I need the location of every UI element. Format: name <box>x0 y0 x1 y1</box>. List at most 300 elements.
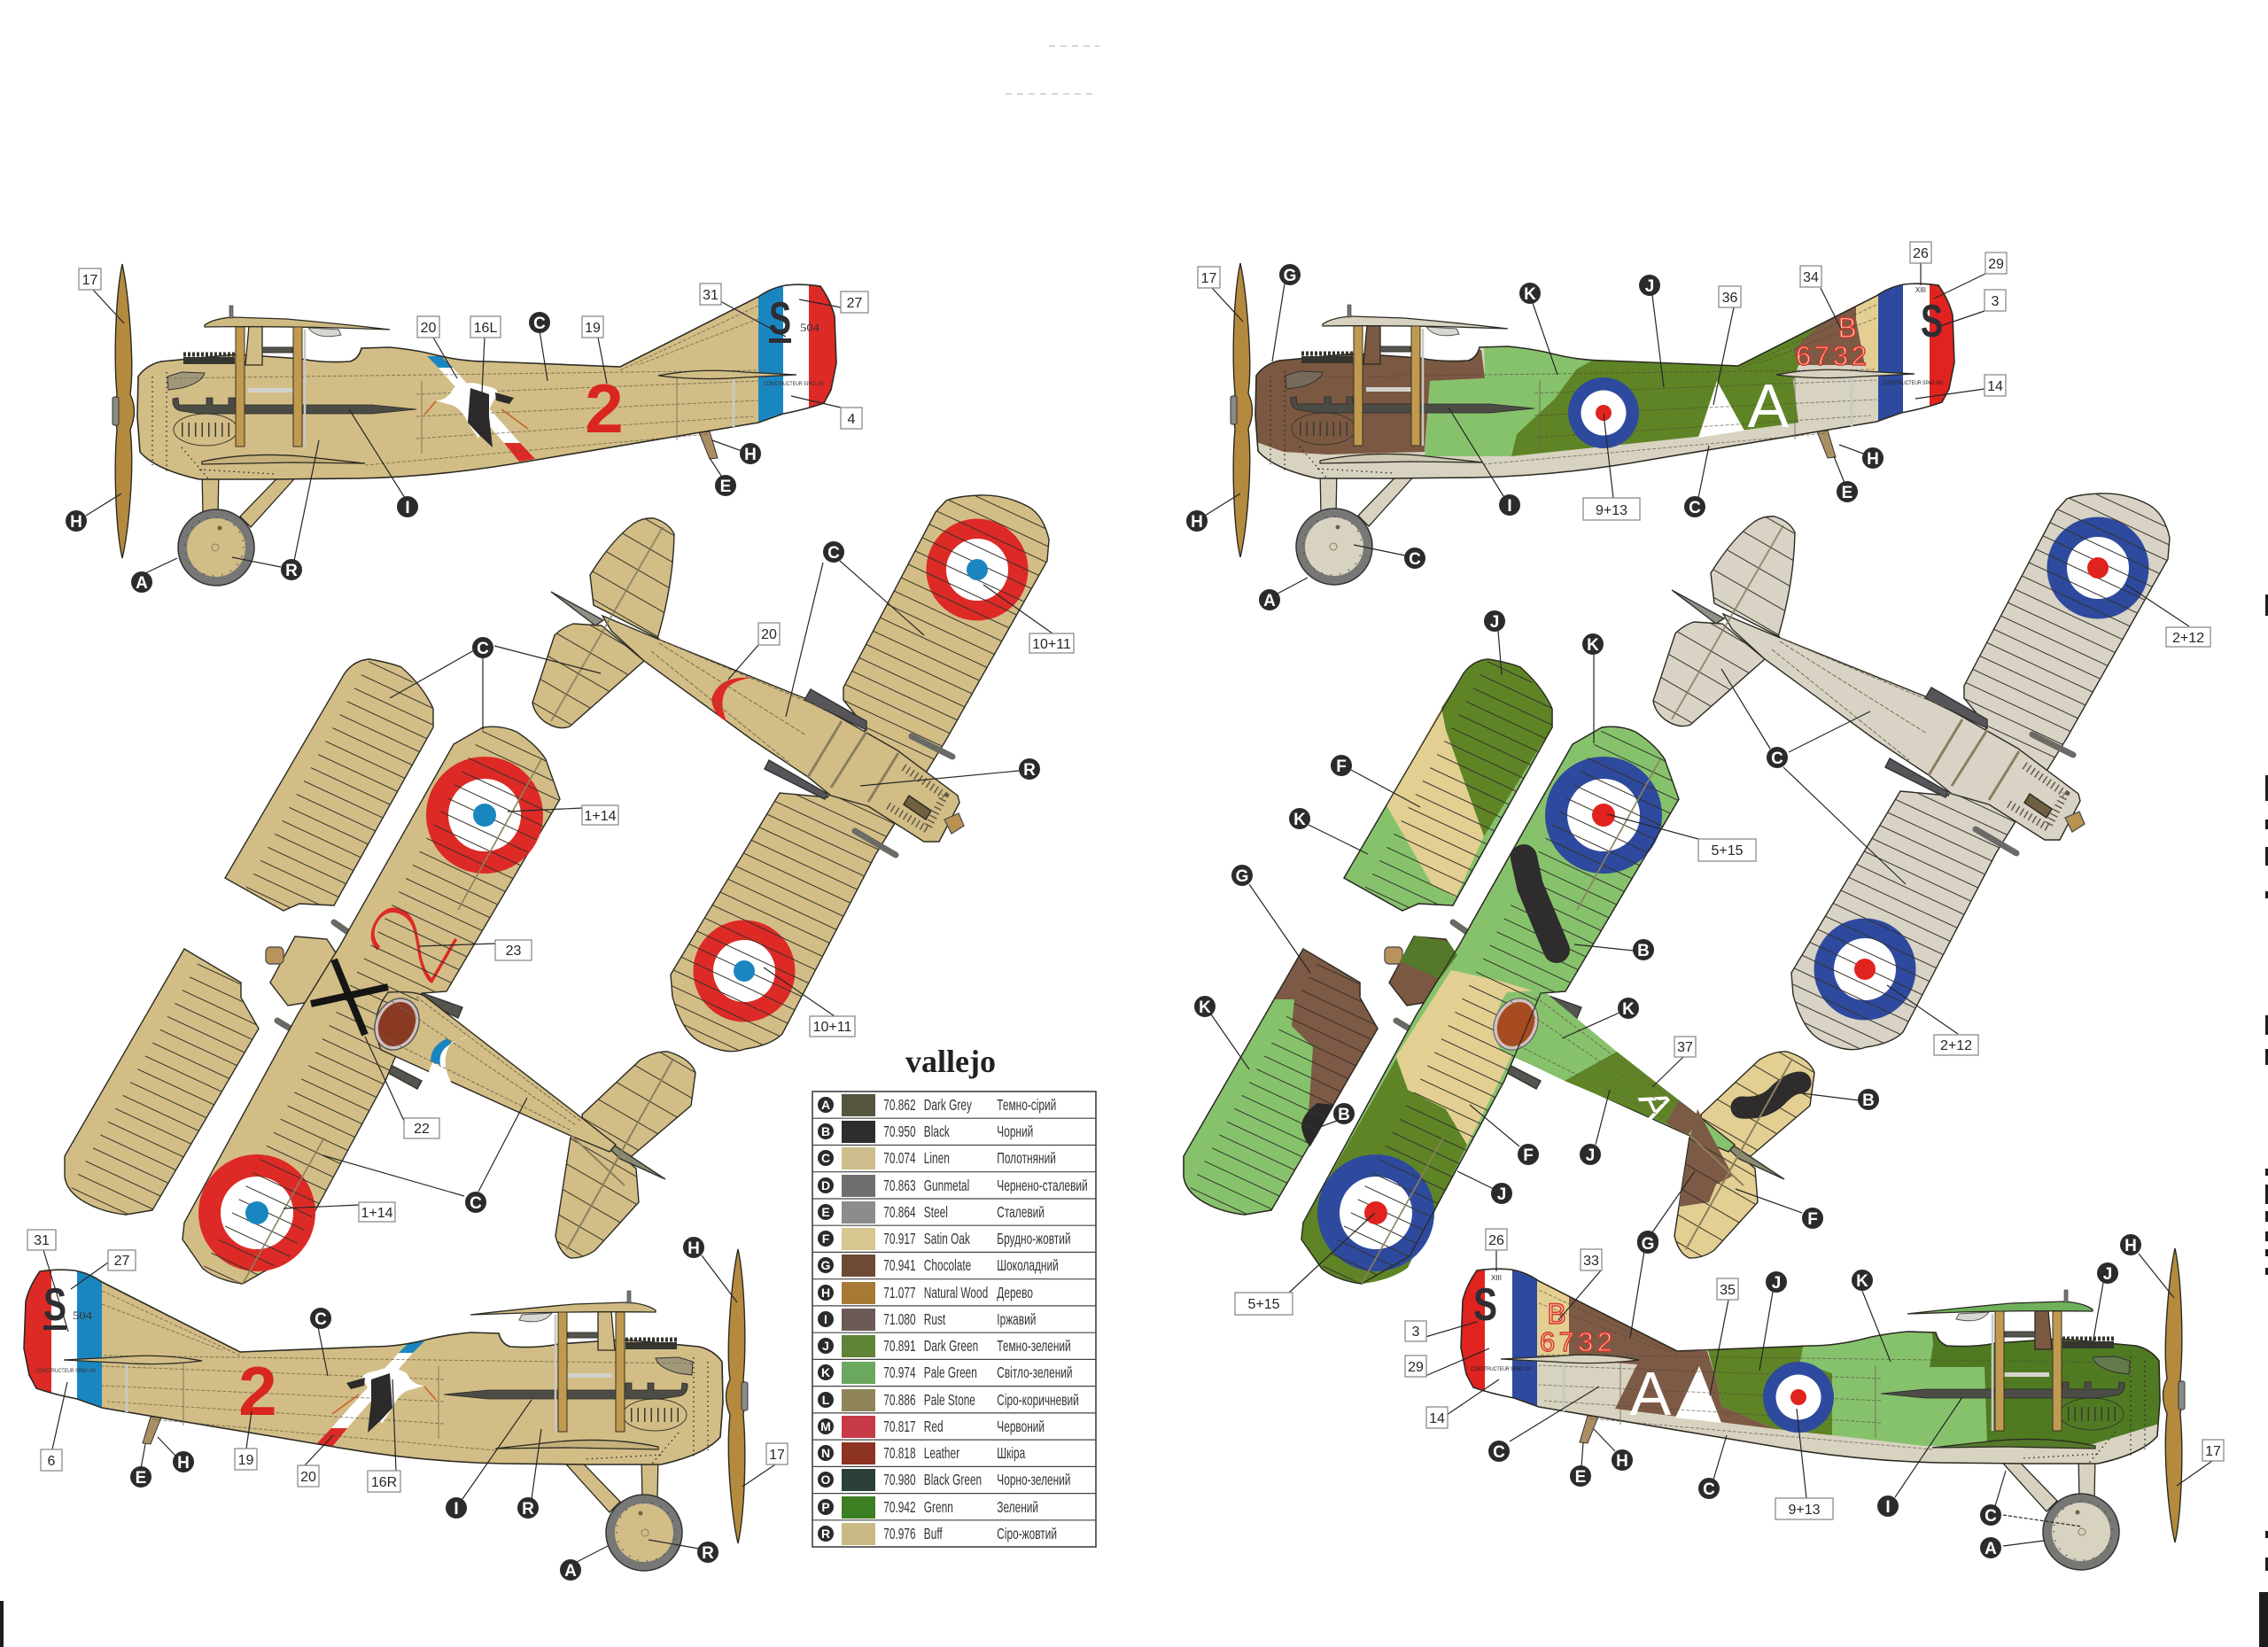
aircraft: British SPAD right side view: B <box>1547 1298 1566 1330</box>
callout 4: 4 <box>848 412 856 427</box>
callout H propeller: H <box>1191 513 1203 532</box>
callout 16R: 16R <box>371 1475 397 1490</box>
callout 14 <box>1915 375 2006 399</box>
callout E <box>130 1444 151 1488</box>
callouts: British right side view <box>1405 1229 2224 1558</box>
legend row J <box>818 1335 1071 1357</box>
callouts: French upper surfaces <box>284 637 618 1222</box>
legend row H: Дерево <box>997 1285 1033 1302</box>
callout 27 <box>71 1250 136 1289</box>
legend row I <box>818 1309 1036 1331</box>
aircraft: British SPAD top view <box>1653 493 2170 1050</box>
callout K lower: K <box>1199 998 1211 1017</box>
legend row L: Pale Stone <box>924 1392 975 1410</box>
callout C bottom: C <box>470 1194 482 1213</box>
camouflage: fuselage: A <box>1629 1082 1683 1126</box>
callout 17 <box>79 268 124 323</box>
legend row L: L <box>822 1393 830 1407</box>
callout 3: 3 <box>1992 294 2000 309</box>
legend row K: 70.974 <box>883 1364 916 1382</box>
legend row L: Сіро-коричневий <box>997 1392 1079 1410</box>
legend row A: Темно-сірий <box>997 1097 1056 1115</box>
legend row R: Сіро-жовтий <box>997 1526 1057 1543</box>
callout 19: 19 <box>585 321 601 336</box>
callout C gear <box>1980 1471 2082 1527</box>
legend row A: A <box>821 1098 830 1112</box>
legend row R: 70.976 <box>883 1526 916 1543</box>
callout J: J <box>1772 1274 1781 1293</box>
callout J top: J <box>1490 613 1499 632</box>
legend row H: H <box>821 1286 830 1300</box>
callout K lower <box>1194 996 1249 1069</box>
callout 20: 20 <box>761 627 777 642</box>
callout J fuselage: J <box>1586 1146 1595 1165</box>
callout C: C <box>1771 750 1783 768</box>
callout E <box>1834 456 1858 502</box>
aircraft: British SPAD right side view <box>1453 1248 2185 1570</box>
legend row F <box>818 1228 1070 1250</box>
callout R: R <box>1023 761 1036 780</box>
legend row E: E <box>821 1205 830 1219</box>
legend row E: Steel <box>924 1204 948 1222</box>
legend row A: 70.862 <box>883 1097 916 1115</box>
callout 27: 27 <box>847 296 863 311</box>
legend row E: 70.864 <box>883 1204 916 1222</box>
callout 27: 27 <box>114 1254 129 1269</box>
callout K wing <box>1582 633 1604 743</box>
callout H propeller <box>2120 1234 2174 1298</box>
legend row N <box>818 1442 1026 1464</box>
markings: French right side view: S <box>43 1279 66 1331</box>
callout F tail <box>1736 1189 1823 1229</box>
callout 31 <box>27 1230 68 1332</box>
callout 5+15 upper <box>1607 814 1756 861</box>
aircraft: British SPAD right side view: XIII <box>1491 1274 1502 1282</box>
callout 23 <box>419 940 532 960</box>
callout 10+11 upper: 10+11 <box>1032 637 1071 652</box>
legend row F: Satin Oak <box>924 1231 970 1248</box>
callout C belly: C <box>1689 499 1701 517</box>
markings: French right side view: CONSTRUCTEUR SPAD XIII <box>35 1369 96 1374</box>
aircraft: French SPAD left side view: CONSTRUCTEUR SPAD XIII <box>764 382 824 387</box>
callout J <box>1639 275 1664 387</box>
callout C wheel <box>1354 545 1425 569</box>
callout H propeller: H <box>70 513 82 532</box>
callout J <box>1759 1271 1787 1371</box>
callout H propeller <box>66 493 121 532</box>
aircraft: British SPAD right side view: CONSTRUCTEUR SPAD XIII <box>1471 1367 1531 1372</box>
aircraft: British SPAD right side view: S <box>1473 1279 1497 1331</box>
legend row A <box>818 1094 1056 1116</box>
callout 19: 19 <box>238 1453 253 1468</box>
callout G <box>1231 865 1310 973</box>
callout C: C <box>827 544 840 563</box>
legend row D: Gunmetal <box>924 1177 969 1195</box>
aircraft: British SPAD right side view: 6732 <box>1540 1326 1612 1357</box>
legend row M: 70.817 <box>883 1418 916 1436</box>
camouflage: upper wing <box>1301 858 1557 1284</box>
callout H skid <box>1839 445 1884 469</box>
callout 26: 26 <box>1488 1233 1504 1248</box>
legend row P: 70.942 <box>883 1499 916 1517</box>
callout 17: 17 <box>2205 1444 2221 1459</box>
callout 14 <box>1426 1379 1499 1428</box>
callout G: G <box>1284 267 1296 285</box>
callout 4 <box>791 396 862 429</box>
callout C belly: C <box>1703 1480 1715 1499</box>
callout C <box>1721 669 1906 884</box>
callout H skid: H <box>177 1454 190 1472</box>
callout B tail: B <box>1862 1092 1875 1110</box>
legend row I: Іржавий <box>997 1311 1036 1329</box>
callout F wing <box>1470 1105 1539 1165</box>
callout A: A <box>1263 592 1276 610</box>
callout 3 <box>1405 1321 1477 1341</box>
legend row B: 70.950 <box>883 1123 916 1141</box>
callout 27 <box>799 291 868 313</box>
callout R wheel <box>232 557 281 567</box>
legend row B <box>818 1121 1033 1143</box>
callout J top <box>1484 610 1505 675</box>
callout H skid: H <box>1616 1452 1628 1471</box>
callout 31: 31 <box>703 288 718 303</box>
callout B wing: B <box>1637 942 1650 960</box>
callout K wing: K <box>1587 636 1599 655</box>
aircraft: British SPAD right side view: A <box>1630 1359 1672 1428</box>
callout 16R <box>368 1379 400 1492</box>
aircraft: British SPAD upper surfaces <box>1184 659 1814 1284</box>
heading: vallejo: vallejo <box>905 1044 996 1079</box>
aircraft: British SPAD left side view <box>1231 263 1960 585</box>
callout K fuselage <box>1562 998 1639 1038</box>
callouts: British upper surfaces <box>1194 610 1879 1315</box>
callout 17 <box>2177 1440 2224 1486</box>
legend row N: Шкіра <box>997 1445 1026 1463</box>
callout I <box>446 1400 532 1519</box>
callout E: E <box>136 1469 146 1488</box>
aircraft: French SPAD top view <box>532 495 1049 1052</box>
callout G tail: G <box>1642 1233 1654 1252</box>
callout 10+11 upper <box>983 585 1074 653</box>
legend row P: P <box>821 1500 830 1514</box>
callout 10+11 lower <box>764 967 855 1037</box>
callout C <box>529 312 550 381</box>
legend row O: 70.980 <box>883 1472 916 1489</box>
callout K fuselage: K <box>1622 1000 1635 1019</box>
callout R wheel <box>649 1540 718 1563</box>
legend row C: 70.074 <box>883 1150 916 1168</box>
legend row N: Leather <box>924 1445 959 1463</box>
legend row B: Чорний <box>997 1123 1033 1141</box>
callout H skid <box>1594 1429 1633 1471</box>
camouflage: fuselage <box>1495 991 1800 1207</box>
legend row R <box>818 1523 1057 1545</box>
legend row O: Black Green <box>924 1472 982 1489</box>
callout H skid <box>712 440 761 464</box>
legend row J: Темно-зелений <box>997 1338 1071 1356</box>
legend row I: I <box>824 1312 827 1326</box>
callout E: E <box>1842 484 1852 502</box>
callout F <box>1331 755 1420 807</box>
callout A: A <box>136 574 148 593</box>
callout 1+14 upper: 1+14 <box>584 809 617 824</box>
callout K <box>1852 1270 1891 1362</box>
callout 29 <box>1405 1348 1489 1377</box>
aircraft: French SPAD upper surfaces <box>65 659 695 1284</box>
aircraft: British SPAD left side view: XIII <box>1915 286 1926 294</box>
callout 29 <box>1934 252 2007 299</box>
legend row J: Dark Green <box>924 1338 978 1356</box>
legend row O: Чорно-зелений <box>997 1472 1070 1489</box>
legend row J: J <box>822 1339 829 1353</box>
legend row N: 70.818 <box>883 1445 916 1463</box>
callout 16L: 16L <box>474 321 497 336</box>
callout R wing <box>517 1429 541 1519</box>
legend row K: Pale Green <box>924 1364 977 1382</box>
callout H skid: H <box>1867 450 1879 469</box>
legend row H <box>818 1282 1033 1304</box>
legend row D <box>818 1175 1088 1197</box>
callout 35: 35 <box>1720 1283 1736 1298</box>
aircraft: French SPAD right side view <box>21 1249 748 1571</box>
callout H propeller: H <box>2124 1237 2137 1255</box>
legend row C: C <box>821 1151 830 1165</box>
legend row G: 70.941 <box>883 1257 916 1275</box>
aircraft: British SPAD left side view: 6732 <box>1796 340 1867 371</box>
legend row E <box>818 1201 1045 1224</box>
legend row D: Чернено-сталевий <box>997 1177 1088 1195</box>
callout 3: 3 <box>1412 1325 1420 1340</box>
legend row N: N <box>821 1446 830 1460</box>
legend row M: Червоний <box>997 1418 1045 1436</box>
aircraft: British SPAD left side view: S <box>1921 296 1943 347</box>
callout C: C <box>533 315 546 333</box>
callout C bottom <box>322 1098 527 1213</box>
callout A <box>1259 578 1308 610</box>
callout J wing <box>1457 1171 1512 1204</box>
callout R wing: R <box>285 562 298 580</box>
legend row L: 70.886 <box>883 1392 916 1410</box>
legend row H: Natural Wood <box>924 1285 988 1302</box>
callout H propeller <box>1186 493 1240 532</box>
callout 19 <box>582 316 607 384</box>
legend row M: Red <box>924 1418 944 1436</box>
camouflage: detached wing upper <box>1386 659 1552 897</box>
legend row K: Світло-зелений <box>997 1364 1073 1382</box>
callout C: C <box>315 1310 327 1329</box>
callout G <box>1630 1232 1658 1338</box>
callout F tail: F <box>1807 1210 1818 1229</box>
callout C <box>310 1308 331 1376</box>
callout 2+12 upper <box>2126 585 2210 647</box>
callout G tail <box>1637 1171 1695 1252</box>
callout 20 <box>298 1435 333 1487</box>
callout J fuselage <box>1580 1090 1610 1165</box>
callout I: I <box>1507 497 1512 516</box>
callout A <box>131 558 177 593</box>
legend row G: G <box>821 1258 831 1272</box>
callout C tail: C <box>1493 1443 1505 1462</box>
callout B tail <box>1788 1089 1879 1110</box>
callout 37: 37 <box>1677 1040 1693 1055</box>
callout C <box>786 541 924 717</box>
callout 22: 22 <box>414 1122 430 1137</box>
callout 10+11 lower: 10+11 <box>813 1020 851 1035</box>
callout 16L <box>470 316 501 392</box>
markings: French right side view <box>35 1279 277 1430</box>
callouts: British top view <box>1721 585 2210 1055</box>
aircraft: British SPAD left side view: A <box>1748 371 1790 440</box>
callout J wing: J <box>1497 1185 1506 1204</box>
callout 36: 36 <box>1722 291 1738 306</box>
callout 6: 6 <box>48 1454 56 1469</box>
aircraft: British SPAD left side view: B <box>1837 312 1857 344</box>
callout I: I <box>405 499 410 517</box>
legend row C <box>818 1147 1056 1169</box>
callout 23: 23 <box>506 944 521 959</box>
callout G: G <box>1642 1235 1654 1254</box>
callout H propeller: H <box>687 1239 700 1258</box>
legend row F: 70.917 <box>883 1231 916 1248</box>
callout 19 <box>235 1411 257 1470</box>
callout 17 <box>742 1443 788 1487</box>
callout I: I <box>454 1500 459 1519</box>
callouts: French top view <box>728 541 1074 1037</box>
legend row R: Buff <box>924 1526 943 1543</box>
legend row O <box>818 1469 1070 1491</box>
callout 9+13: 9+13 <box>1596 503 1627 518</box>
callout 26 <box>1486 1229 1507 1271</box>
callout 31 <box>700 284 786 337</box>
legend row R: R <box>821 1527 830 1541</box>
legend row F: Брудно-жовтий <box>997 1231 1070 1248</box>
legend row D: D <box>821 1178 830 1193</box>
aircraft: French SPAD left side view: S <box>769 293 791 345</box>
callout G: G <box>1236 867 1248 886</box>
callout C top <box>390 637 601 730</box>
aircraft: French SPAD upper surfaces: 2 <box>333 877 487 1006</box>
callout K: K <box>1524 285 1536 304</box>
callout B lower: B <box>1338 1106 1350 1124</box>
callout E <box>1570 1442 1591 1487</box>
callout A: A <box>1984 1540 1997 1558</box>
legend row D: 70.863 <box>883 1177 916 1195</box>
callout R wing <box>281 440 319 580</box>
legend row J: 70.891 <box>883 1338 916 1356</box>
legend row P: Grenn <box>924 1499 953 1517</box>
callout A: A <box>564 1562 577 1581</box>
legend row I: Rust <box>924 1311 946 1329</box>
callout 26 <box>1910 242 1931 285</box>
callout I <box>349 409 418 517</box>
callouts: British left side view <box>1186 242 2007 610</box>
callout 22 <box>365 1037 439 1138</box>
callout 20 <box>417 316 457 378</box>
legend row K: K <box>821 1365 830 1379</box>
callout J nose: J <box>2103 1265 2112 1284</box>
callout 34: 34 <box>1803 270 1819 285</box>
edge registration marks <box>0 594 2268 1647</box>
callout B wing <box>1574 939 1654 960</box>
callout 17: 17 <box>769 1448 785 1463</box>
callout 20 <box>728 623 780 680</box>
legend row C: Linen <box>924 1150 950 1168</box>
callout 2+12 upper: 2+12 <box>2172 631 2204 646</box>
callout 2+12 lower <box>1887 985 1978 1055</box>
callout K detached: K <box>1293 811 1306 829</box>
callout C gear: C <box>1984 1507 1997 1526</box>
callout 35 <box>1710 1278 1738 1395</box>
callout C belly <box>1698 1435 1727 1499</box>
callout 9+13 <box>1775 1409 1833 1519</box>
callout 2+12 lower: 2+12 <box>1940 1038 1972 1053</box>
callout 17 <box>1198 267 1243 322</box>
callout A <box>560 1546 608 1581</box>
callout 37 <box>1652 1037 1696 1087</box>
callout 33 <box>1558 1249 1602 1320</box>
callout J: J <box>1645 277 1654 296</box>
callout 14: 14 <box>1429 1411 1445 1426</box>
legend row O: O <box>821 1472 831 1487</box>
callout 34 <box>1800 266 1842 330</box>
camouflage: detached wing lower <box>1273 949 1378 1146</box>
callout H skid <box>158 1437 194 1472</box>
legend row G: Chocolate <box>924 1257 971 1275</box>
legend row M <box>818 1416 1045 1438</box>
callout R wheel: R <box>702 1544 714 1563</box>
callout 5+15 lower <box>1235 1213 1375 1315</box>
callout 9+13 <box>1583 414 1640 520</box>
callouts: French right side view <box>27 1230 788 1581</box>
callout 29: 29 <box>1988 257 2004 272</box>
legend row P: Зелений <box>997 1499 1038 1517</box>
callout 17: 17 <box>82 273 97 288</box>
callout 36 <box>1713 286 1741 405</box>
legend row F: F <box>822 1231 830 1246</box>
legend row K <box>818 1362 1073 1384</box>
callout 20: 20 <box>421 321 436 336</box>
callout C wheel: C <box>1409 550 1421 569</box>
callout H propeller <box>683 1237 737 1302</box>
callout 5+15 upper: 5+15 <box>1711 843 1744 858</box>
callout F wing: F <box>1523 1146 1534 1165</box>
callout E: E <box>720 478 731 496</box>
callout F: F <box>1336 757 1347 776</box>
markings: French right side view: 504 <box>73 1309 93 1322</box>
callout 29: 29 <box>1408 1360 1424 1375</box>
callouts: French left side view <box>66 268 868 593</box>
callout 3 <box>1940 290 2006 326</box>
callout 9+13: 9+13 <box>1788 1503 1821 1518</box>
callout R <box>860 758 1040 786</box>
callout 14: 14 <box>1987 379 2003 394</box>
legend row B: B <box>821 1124 830 1138</box>
callout 26: 26 <box>1913 246 1929 261</box>
callout A <box>1980 1537 2044 1558</box>
legend row I: 71.080 <box>883 1311 916 1329</box>
legend row B: Black <box>924 1123 950 1141</box>
legend row C: Полотняний <box>997 1150 1056 1168</box>
callout I <box>1877 1397 1962 1517</box>
legend row A: Dark Grey <box>924 1097 972 1115</box>
callout 1+14 lower <box>284 1202 395 1222</box>
callout K detached <box>1289 808 1368 854</box>
aircraft: French SPAD left side view: 504 <box>800 321 820 334</box>
callout J nose <box>2093 1262 2118 1344</box>
aircraft: French SPAD left side view: 2 <box>585 369 624 447</box>
callout C tail <box>1488 1387 1599 1462</box>
callout 5+15 lower: 5+15 <box>1247 1297 1280 1312</box>
